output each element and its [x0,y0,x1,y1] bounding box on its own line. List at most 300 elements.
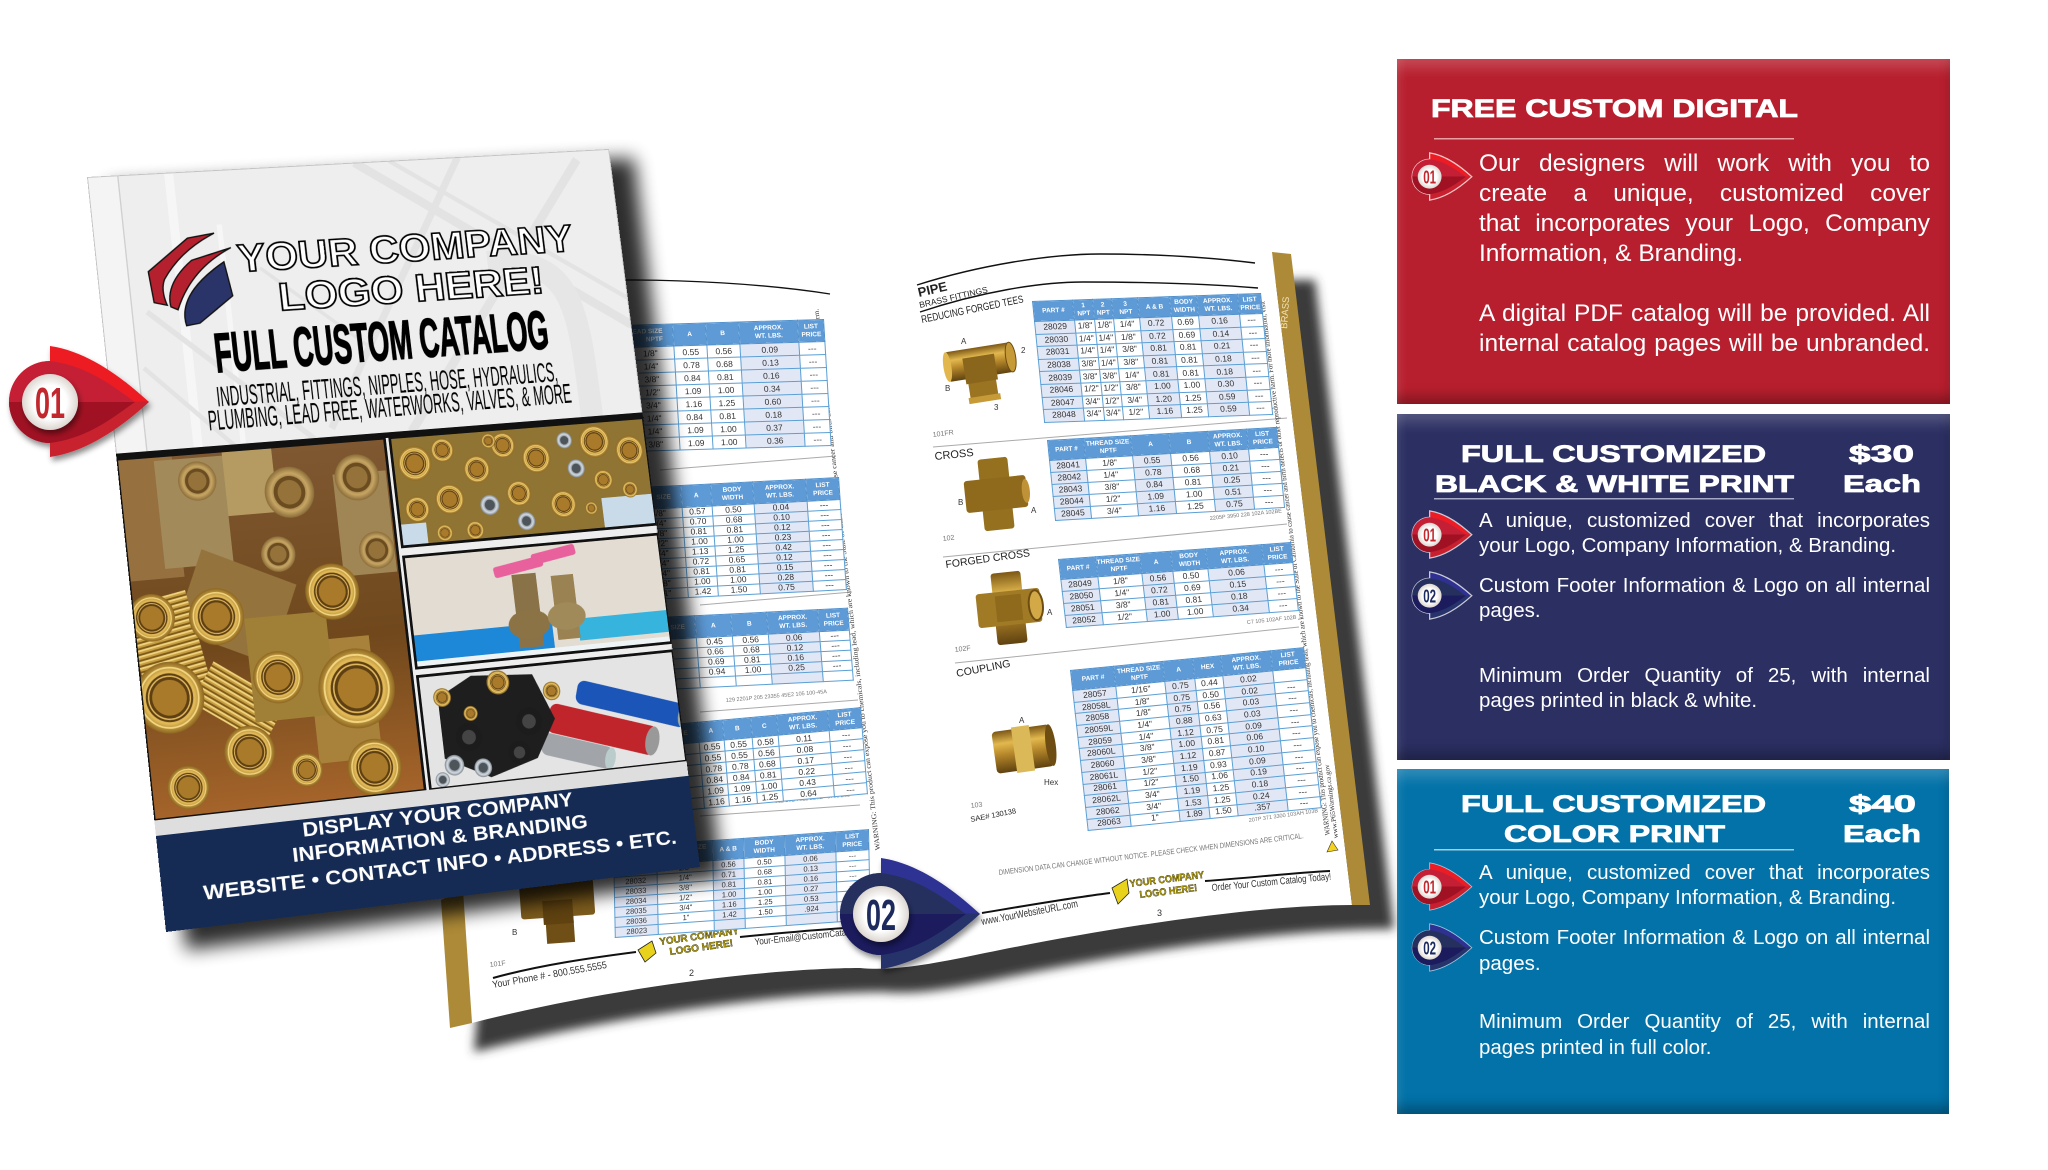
table: cross: B [1186,438,1192,446]
table: left 3: A [711,622,716,629]
dimension labels: Hex [1044,778,1058,787]
table: coupling: 1" [1151,812,1159,823]
table: coupling: 28063 [1097,816,1121,828]
table: coupling: 0.24 [1252,790,1270,801]
table: coupling: 28061L [1089,769,1119,782]
table: reducing forged tees: 0.18 [1216,366,1233,376]
table: coupling: .357 [1254,801,1271,813]
table: coupling: 1/8" [1134,695,1150,707]
table: left 1: 1/8" [643,348,658,358]
table: left 4: 0.22 [798,765,815,777]
table: coupling: 3/8" [1139,742,1155,753]
table: coupling: 0.02 [1241,685,1258,696]
table: coupling: 1.00 [1178,738,1196,750]
body text 2 [1479,574,1930,622]
table: left 2: PRICE [813,489,833,497]
table: coupling: 1/2" [1143,777,1159,788]
table: left 4: 0.58 [757,736,774,747]
table: left 2: 1.25 [728,544,745,555]
table: coupling: 28061 [1093,781,1117,793]
table: left 1: 3/8" [644,374,660,384]
table: coupling: 28058L [1081,699,1111,712]
part code notes [726,439,1319,824]
table: left 4: 0.84 [706,773,723,785]
table: reducing forged tees: BODY [1174,298,1193,306]
table: left 2: --- [824,570,833,580]
table: left 3: 0.06 [785,632,803,643]
table: reducing forged tees: --- [1251,352,1260,363]
table: left 1: 0.56 [715,345,732,356]
table: cross: 1.00 [1185,488,1203,499]
table: left 1: 0.13 [762,357,779,367]
table: left 2: x 1/4" [648,558,670,569]
table: left 5: LIST [845,832,859,840]
table: left 1: --- [809,369,818,379]
body text 2 [1479,926,1930,975]
right page header rules [917,254,1258,312]
part code notes: 129 2201P 205 23355 45E2 105 100-45A [726,689,828,704]
dimension note: DIMENSION DATA CAN CHANGE WITHOUT NOTICE. PLEASE CHECK WHEN DIMENSIONS ARE CRITICAL. [998,831,1304,877]
background pipes [123,149,642,452]
table: reducing forged tees: --- [1249,340,1259,350]
heading and price: FULL CUSTOMIZED [1461,791,1766,818]
table: coupling: 1.89 [1186,808,1203,820]
table: left 5: --- [849,861,857,871]
heading and price [1434,791,1921,850]
table: left 1: 1.00 [721,436,738,447]
table: left 3: --- [830,630,839,641]
table: cross: --- [1262,473,1271,483]
table: coupling: --- [1288,693,1297,703]
product: left page tee [519,878,597,946]
table: coupling: LIST [1280,651,1295,659]
table: left 4: 0.55 [704,751,722,763]
table: coupling: 0.50 [1202,688,1219,700]
table: cross: 1/4" [1103,469,1119,480]
table: left 5: 1.50 [758,907,773,917]
table: left 3: 0.45 [706,636,723,647]
table: left 1: NPTF [646,335,663,343]
table: coupling: 0.56 [1203,700,1221,712]
table: left 5: 0.53 [804,894,819,904]
icon: 01: 01 [1423,877,1436,898]
table: left 1: 1.09 [687,424,704,435]
heading and price [1434,441,1921,500]
table: left 2: x 1/4" [648,568,670,579]
table: left 5: 28033 [625,886,646,896]
photo frame left [117,438,425,821]
table: reducing forged tees: 1/2" [1103,383,1119,393]
table: coupling: NPTF [1131,673,1148,682]
table: left 1: WT. LBS. [755,332,783,340]
table: forged cross: 1.00 [1186,606,1204,617]
table: forged cross: A [1153,558,1159,566]
photo frame 2 [403,534,672,668]
body text 3 [1479,1010,1930,1059]
table: left 2: --- [823,560,833,570]
table: left 1: 1.00 [720,423,737,434]
table: cross: --- [1261,461,1270,471]
photo: valves and blue pipes [405,536,670,662]
left page footer: 101F [489,960,506,969]
table: forged cross: 1/8" [1112,575,1128,586]
table: left 1: 0.60 [764,396,781,406]
table: cross: 28041 [1056,459,1080,471]
table: coupling: THREAD SIZE [1117,664,1161,675]
table: forged cross: APPROX. [1219,548,1249,557]
table: left 2 [600,477,847,602]
table: left 1: --- [812,421,821,431]
table: forged cross: 1.00 [1153,608,1171,620]
left page warning text: WARNING: This product can expose you to chemicals, including lead, which are known to the State of California to cause cancer and birth defects or other reproductive harm. [812,308,882,851]
table: left 2: 0.10 [773,512,790,522]
table: coupling: 28060 [1090,758,1115,770]
table: cross: 1.25 [1187,500,1204,511]
table: left 2: WT. LBS. [766,491,794,499]
table: cross: APPROX. [1213,431,1243,440]
table: left 3: 1.00 [744,664,762,675]
table: left 3: 0.68 [743,644,760,655]
part code notes: E7 1006 [745,582,766,590]
table: cross: --- [1264,497,1274,507]
table: left 5: 1.00 [758,887,772,897]
table: left 4: 0.56 [758,747,775,758]
table: coupling: 3/4" [1146,800,1162,812]
table: coupling [1070,647,1322,831]
table: left 3: 0.69 [708,656,725,667]
body text 2: Custom Footer Information & Logo on all internal [1479,574,1930,597]
table: left 1: 0.34 [763,383,781,393]
icon: 01 [1412,510,1473,559]
table: reducing forged tees: 1/4" [1100,357,1116,368]
table: coupling: WT. LBS. [1233,662,1261,672]
table: coupling: 0.75 [1174,703,1192,714]
table: reducing forged tees: 1/4" [1124,369,1140,380]
table: left 4: 0.64 [800,787,817,799]
table: left 5: 1/2" [679,893,692,902]
your company logo text [235,217,580,322]
table: reducing forged tees: WT. LBS. [1204,305,1233,313]
table: left 1: 0.16 [763,370,780,380]
table: reducing forged tees: 1.25 [1184,392,1202,403]
body text 2 [1479,300,1930,357]
table: reducing forged tees: NPT [1097,309,1110,316]
table: left 2: A [694,492,699,499]
table: cross: 0.56 [1182,452,1199,463]
table: left 3: B [747,620,752,627]
body text 1: create a unique, customized cover [1479,180,1930,207]
table: left 2: 0.68 [725,514,743,525]
table: left 2: BODY [722,485,742,493]
table: cross: 28044 [1059,495,1084,507]
table: left 5: 1.16 [722,899,737,909]
icon: 02 [1412,923,1472,972]
table: cross: 0.10 [1221,450,1238,461]
table: coupling: 0.81 [1207,735,1225,747]
left page footer: LOGO HERE! [669,938,734,958]
table: cross: 0.51 [1224,486,1242,497]
table: left 1: B [720,329,725,337]
table: left 5: NPTF [676,852,693,860]
navy information band [156,776,700,932]
table: left 5: 0.71 [721,869,736,879]
product: cross [961,455,1034,533]
table: left 5: --- [849,851,856,861]
body text 3: Minimum Order Quantity of 25, with internal [1479,664,1930,687]
table: left 1: 1.16 [685,398,702,409]
table: left 4: 0.78 [732,760,749,772]
body text 1 [1479,861,1930,909]
table: reducing forged tees: 0.14 [1212,328,1230,339]
table: reducing forged tees: 3/8" [1082,371,1098,381]
table: cross: 0.78 [1145,467,1162,478]
table: reducing forged tees: --- [1254,390,1264,400]
table: left 1: 0.55 [682,346,699,357]
table: forged cross: WT. LBS. [1221,556,1249,565]
table: left 5: 28034 [626,896,647,906]
table: reducing forged tees: PRICE [1240,304,1261,311]
table: reducing forged tees: 28046 [1049,384,1074,395]
table: left 4: WT. LBS. [789,722,817,731]
table: coupling: 28058 [1085,711,1110,723]
table: left 5: --- [849,881,857,891]
table: reducing forged tees: APPROX. [1203,297,1233,305]
table: left 2: SIZE [656,493,671,501]
table: forged cross: PART # [1066,563,1090,572]
table: left 1: LIST [804,323,818,330]
band text: INFORMATION & BRANDING [287,820,595,852]
table: left 3: --- [832,660,842,671]
table: forged cross: 1/4" [1114,587,1130,598]
table: coupling: 28059 [1088,734,1112,747]
heading and price: BLACK & WHITE PRINT [1435,471,1794,498]
body text 3: Minimum Order Quantity of 25, with internal [1479,1010,1930,1033]
right page headings: FORGED CROSS [945,547,1031,571]
left page footer: Your Phone # - 800.555.5555 [492,960,608,991]
table: left 5: 0.81 [722,879,736,889]
table: coupling: --- [1295,763,1305,773]
table: left 1: 1.00 [717,384,735,395]
table: left 5: 1.00 [722,889,736,899]
table: left 3: APPROX. [778,613,807,622]
table: reducing forged tees: 0.18 [1215,353,1232,364]
table: reducing forged tees: 0.81 [1179,342,1197,352]
table: reducing forged tees: 3/8" [1123,357,1139,367]
table: left 3: SIZE [670,623,685,631]
table: forged cross: 0.50 [1182,570,1200,581]
table: left 5: 28023 [626,926,647,936]
table: left 1: x 1/4" [641,426,663,436]
warning URL: www.P65Warnings.ca.gov [1323,764,1340,839]
dimension labels: A [961,337,967,346]
table: left 1: --- [813,434,822,444]
table: forged cross: PRICE [1267,553,1288,561]
table: left 2: 0.23 [774,532,792,542]
label: BRASS tab: BRASS [1279,296,1292,329]
table: coupling: 1/4" [1138,730,1154,742]
panel: color print [1397,769,1949,1114]
table: left 5: 0.56 [721,859,736,869]
table: left 1: 3/4" [646,400,661,410]
table: left 4: 0.55 [703,740,721,752]
table: left 3: --- [832,650,841,661]
table: cross: 0.55 [1143,455,1161,466]
icon: 02: 02 [1423,586,1436,607]
table: left 4: 1.16 [734,793,752,805]
right page headings [916,279,1031,824]
table: left 2: 0.15 [776,562,794,572]
table: left 2: 0.70 [689,516,707,527]
table: coupling: --- [1294,751,1304,762]
right page footer: Order Your Custom Catalog Today! [1211,872,1332,894]
table: reducing forged tees: 3/4" [1085,396,1101,406]
table: left 4: B [735,725,740,732]
table: left 4: 0.17 [797,754,814,766]
gold edge left page [441,890,472,1028]
table: cross: LIST [1255,430,1269,438]
table: left 4: 0.08 [796,743,814,755]
body text 1: your Logo, Company Information, & Branding. [1479,886,1896,909]
table: coupling: 1/8" [1135,707,1151,718]
table: left 1: 0.84 [684,372,701,383]
table: coupling: --- [1289,704,1298,715]
table: cross: 0.25 [1223,474,1241,485]
table: reducing forged tees: --- [1247,315,1256,325]
table: left 5: 1/4" [679,873,692,882]
table: reducing forged tees: --- [1252,365,1261,375]
table: left 2: 3/8" [652,528,668,539]
table: left 2: 0.42 [775,542,792,552]
table: left 5: 28031 [625,866,646,876]
table: left 2: 1/8" [651,508,666,519]
table: left 1: 0.81 [717,371,734,382]
table: forged cross: BODY [1179,551,1198,560]
table: left 5: .924 [804,904,819,914]
table: left 2: 0.72 [692,556,710,567]
table: coupling: 1.53 [1184,796,1202,808]
table: left 4: 0.68 [759,758,776,769]
spine line [117,175,198,928]
table: left 5: WIDTH [754,846,775,855]
table: left 2: 0.12 [774,522,791,532]
table: coupling: 1/2" [1142,765,1158,777]
table: reducing forged tees: 3/8" [1122,344,1138,355]
table: reducing forged tees: A & B [1145,303,1164,311]
table: left 4: --- [842,740,852,751]
table: reducing forged tees: 3/4" [1106,408,1121,418]
spine crease [87,175,198,932]
table: reducing forged tees: 1/8" [1077,320,1093,331]
table: reducing forged tees: NPT [1119,308,1133,315]
table: cross: A [1148,441,1153,448]
table: reducing forged tees: --- [1256,403,1265,413]
icon: 02 [1412,571,1473,620]
table: left 5: 1" [682,913,690,922]
table: left 1: APPROX. [754,324,783,332]
table: coupling: 1.50 [1215,805,1232,817]
table: left 4: 0.81 [759,769,777,780]
table: forged cross: 0.15 [1229,579,1247,590]
table: forged cross: 0.34 [1232,603,1249,614]
heading and price: Each [1843,471,1921,498]
table: reducing forged tees: 28029 [1043,321,1067,332]
table: left 1: 1.09 [684,385,702,396]
table: forged cross: 28051 [1070,602,1095,613]
icon: 01: 01 [1423,167,1436,188]
band text [197,778,678,905]
table: left 2: 1/4" [651,518,667,529]
table: cross: 3/8" [1104,481,1120,492]
table: reducing forged tees: 0.59 [1220,404,1237,414]
table: left 3: --- [831,640,840,651]
table: reducing forged tees: 1 [1081,302,1085,309]
table: forged cross: 0.18 [1230,591,1248,602]
table: left 4: 1.00 [760,780,778,791]
dimension labels: A [1047,608,1053,617]
table: left 4: C [762,722,767,730]
body text 2: internal catalog pages will be unbranded. [1479,330,1930,357]
table: left 2: 0.81 [726,524,743,535]
table: reducing forged tees: 1/4" [1080,345,1096,356]
table: left 5: 28036 [626,916,647,926]
left page footer: 2 [689,968,694,978]
table: reducing forged tees: 3/4" [1127,394,1143,405]
right page headings: PIPE [916,279,949,300]
table: left 1: 1.25 [718,397,735,408]
table: left 4: --- [843,751,852,762]
white page sheet [463,252,1352,1023]
table: reducing forged tees: 0.69 [1177,317,1194,327]
panel: black and white print [1397,414,1950,760]
heading: free custom digital: FREE CUSTOM DIGITAL [1431,95,1798,123]
table: reducing forged tees: 1/8" [1120,331,1136,342]
table: forged cross: 1/2" [1117,611,1133,622]
table: reducing forged tees: 1/4" [1098,332,1114,343]
table: reducing forged tees: 28038 [1047,359,1071,370]
table: left 1: --- [810,382,819,392]
table: left 3: 0.16 [787,652,804,663]
left page header line [625,280,830,294]
table: cross: PRICE [1253,438,1273,446]
table: cross [1047,427,1285,521]
table: left 4: 1.09 [733,782,751,794]
table: cross: 1/2" [1105,493,1121,504]
table: reducing forged tees: 0.59 [1218,391,1236,402]
table: left 4: 0.84 [732,771,750,783]
table: left 5: BODY [755,838,774,847]
table: cross: NPTF [1100,447,1117,455]
table: left 3 [640,608,854,691]
left page footer: YOUR COMPANY [659,926,740,948]
table: left 5: --- [849,891,857,901]
icon: 02: 02 [1423,938,1436,959]
table: cross: --- [1263,485,1272,495]
warning text: WARNING: This product can expose you to chemicals, including lead, which are known to the State of California to cause cancer and birth defects or other reproductive harm. For more information, visit [1257,300,1332,836]
table: left 2: 0.50 [725,504,742,515]
body text 3: pages printed in full color. [1479,1036,1711,1059]
table: cross: WT. LBS. [1214,439,1243,448]
table: left 4: 0.55 [730,738,747,750]
table: cross: PART # [1055,445,1078,453]
logo mark [145,232,239,328]
table: coupling: 0.09 [1245,720,1262,731]
part code notes: 2205P 3950 228 102A 102BE [1210,508,1283,522]
heading and price: Each [1843,821,1921,848]
table: reducing forged tees: 28047 [1050,397,1075,408]
table: left 5: 28035 [626,906,647,916]
body text 1: A unique, customized cover that incorporates [1479,861,1930,884]
icon: 01: 01 [1423,525,1436,546]
